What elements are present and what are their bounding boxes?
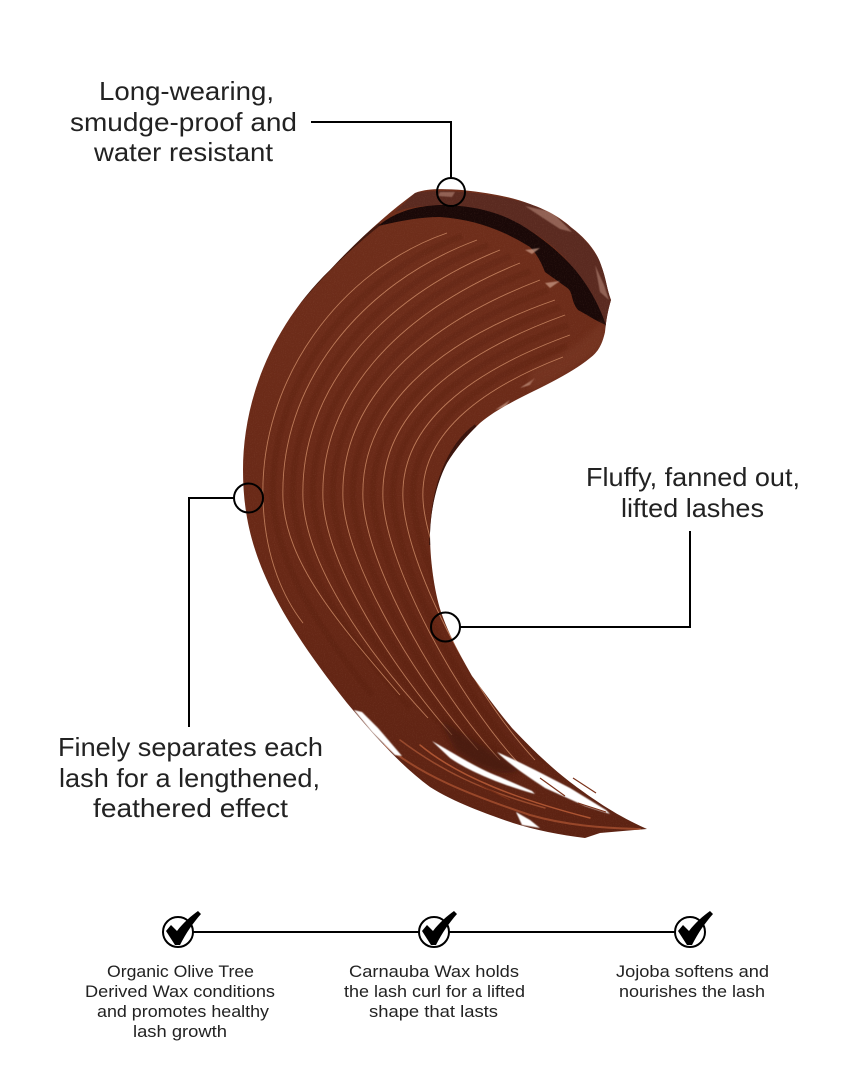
dark shadow band [378,205,606,325]
connector and marker [431,531,690,642]
benefit text: carnauba wax: shape that lasts [369,1003,498,1021]
callout text: lifted lashes [621,493,764,523]
callout: fluffy lashes [431,462,800,642]
callout text [586,462,800,523]
stray bristle marks [480,778,606,812]
timeline line [193,931,675,933]
benefit text: jojoba [616,963,769,1001]
inner dark edge [431,426,476,545]
callout: long-wearing [70,76,465,206]
callout text [70,76,297,167]
callout text: lash for a lengthened, [59,763,320,793]
benefit text: carnauba wax: the lash curl for a lifted [344,983,525,1001]
benefit text: carnauba wax: Carnauba Wax holds [349,963,519,981]
callout text: Finely separates each [58,732,323,762]
crust flecks [438,192,609,300]
callout text: water resistant [93,137,274,167]
grain texture [240,185,650,845]
connector and marker [311,122,465,206]
connector and marker [189,484,263,727]
crusty top edge [395,191,611,330]
callout text: smudge-proof and [70,107,297,137]
icon: check 1 [163,911,201,947]
benefit text: jojoba: nourishes the lash [619,983,765,1001]
tail white gaps [354,710,610,828]
benefits timeline [85,911,769,1041]
callout text [58,732,323,823]
benefit text: jojoba: Jojoba softens and [616,963,769,981]
callout: finely separates [58,484,323,823]
ridge highlights [263,233,570,770]
benefit text: olive wax [85,963,275,1041]
lighter right ridge area [530,320,605,392]
benefit text: olive wax: and promotes healthy [97,1003,270,1021]
callout text: Fluffy, fanned out, [586,462,800,492]
paint swatch [240,185,650,845]
icon: check 2 [419,911,457,947]
grooves: darker bands between ridges [432,565,545,761]
callout text: feathered effect [93,793,289,823]
benefit text: olive wax: lash growth [133,1023,227,1041]
benefit text: carnauba wax [344,963,525,1021]
left dark edge [300,224,380,302]
tail orange streaks [385,740,640,829]
ridge end flecks [495,248,560,410]
benefit text: olive wax: Organic Olive Tree [107,963,254,981]
swatch body [243,189,647,838]
callout text: Long-wearing, [99,76,274,106]
icon: check 3 [675,911,713,947]
tail dark patch [440,720,520,773]
benefit text: olive wax: Derived Wax conditions [85,983,275,1001]
